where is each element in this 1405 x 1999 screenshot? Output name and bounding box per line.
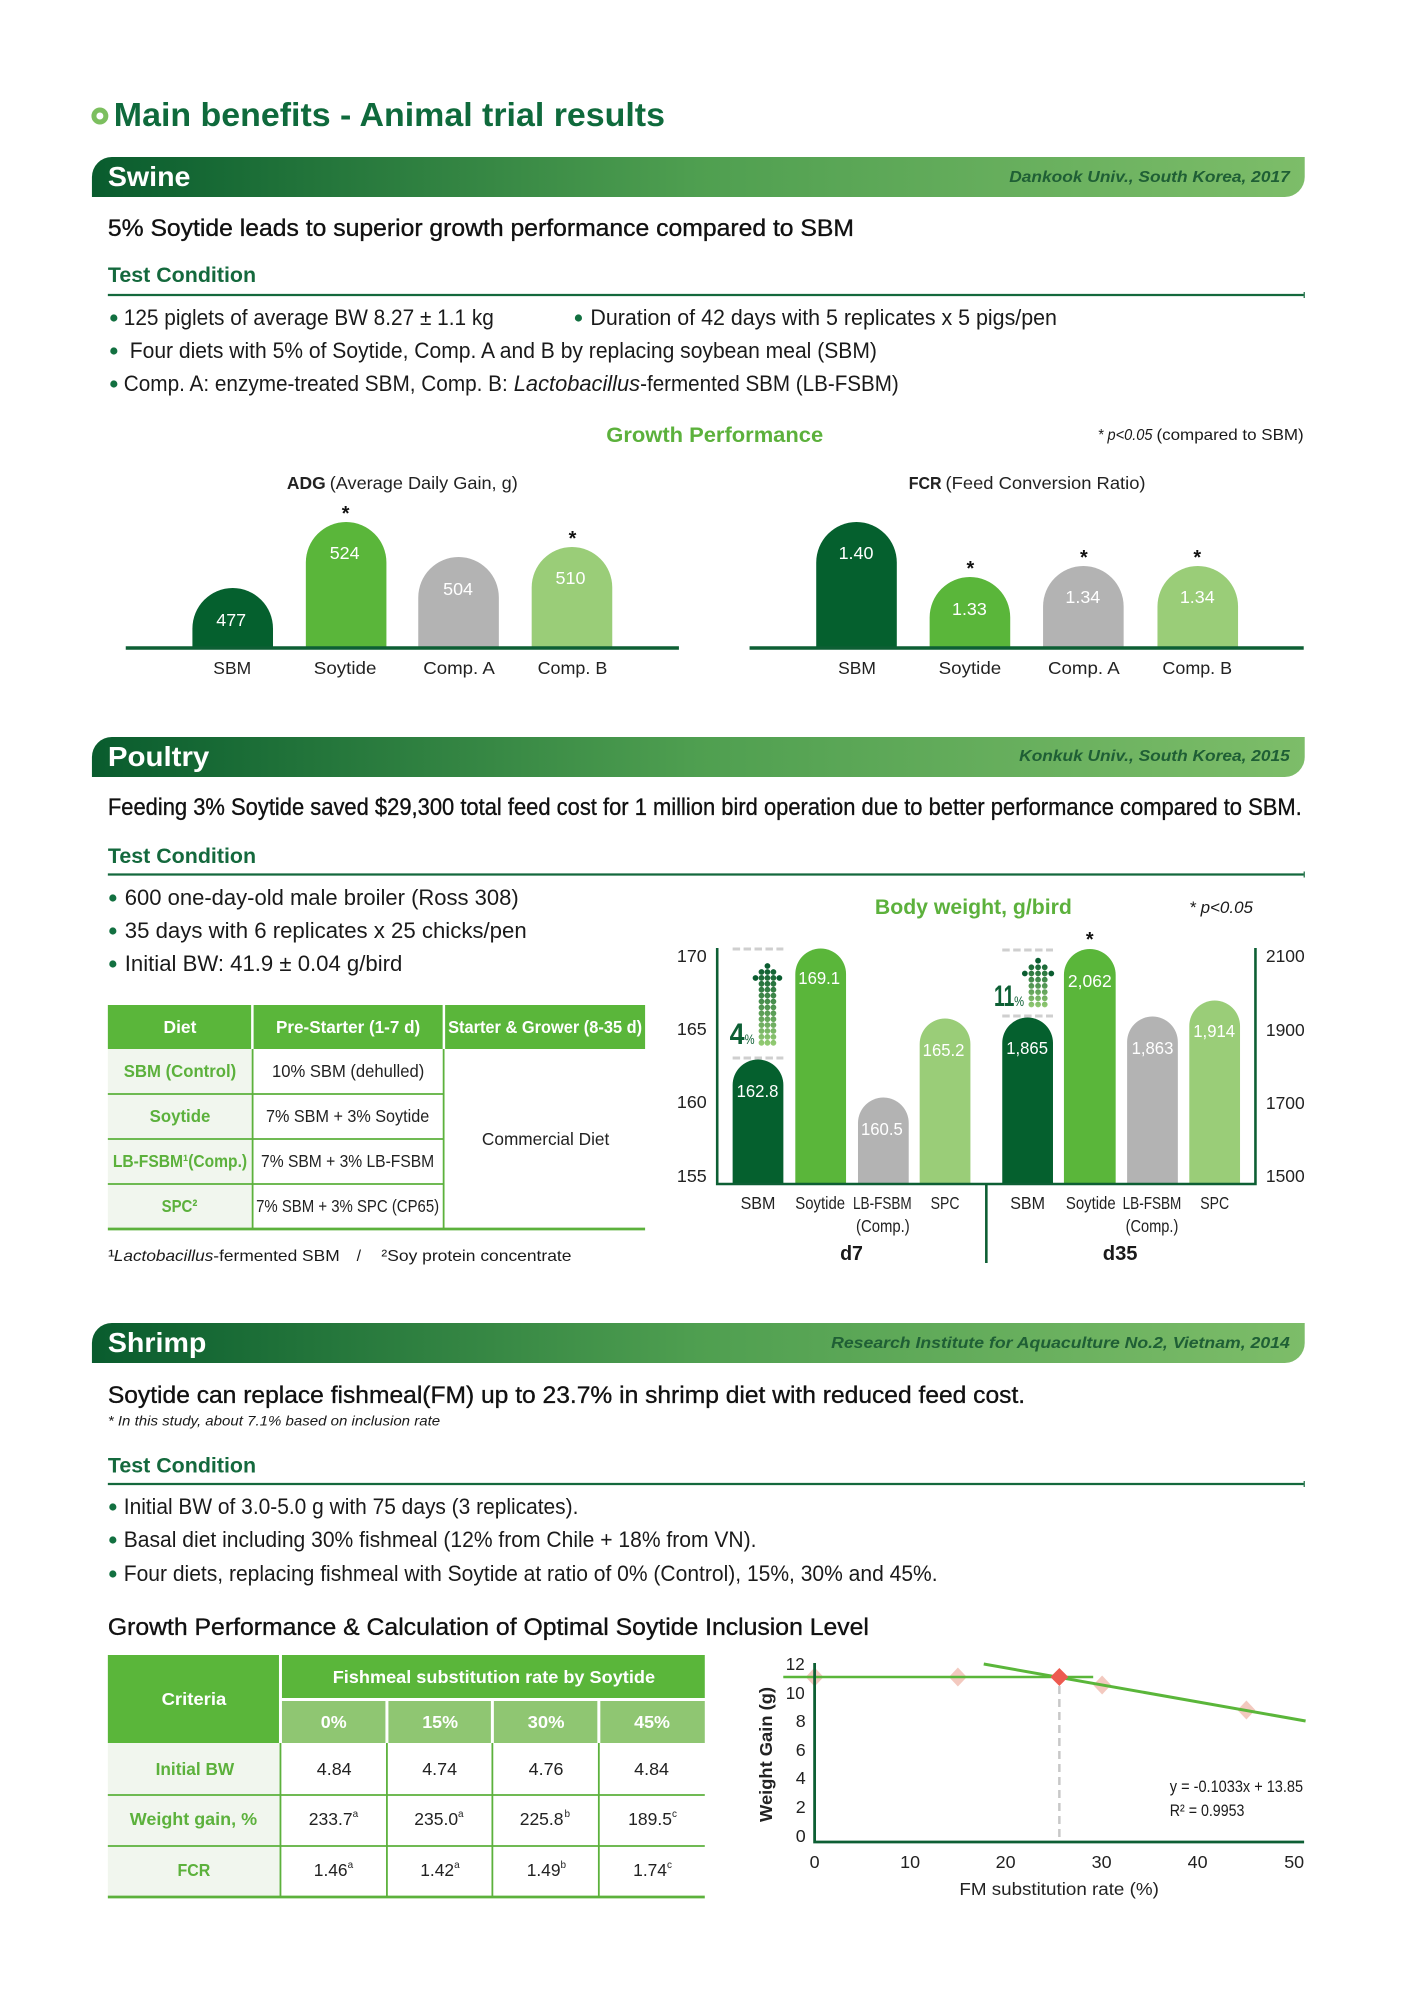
panel: poultry — [92, 737, 1305, 1265]
diet table: 7% SBM + 3% Soytide — [266, 1106, 429, 1126]
diet table: SPC² — [162, 1196, 197, 1216]
diet table: 7% SBM + 3% LB-FSBM — [261, 1151, 434, 1171]
regression equation — [1170, 1777, 1303, 1820]
results table: 1.42 — [420, 1860, 454, 1880]
key message: shrimp: Soytide can replace fishmeal(FM) up to 23.7% in shrimp diet with reduced feed cost. — [108, 1382, 1025, 1409]
results table: b — [565, 1809, 570, 1820]
panel: shrimp — [92, 1323, 1306, 1899]
category labels: Soytide — [795, 1193, 845, 1213]
y axis labels: 12 — [786, 1654, 805, 1674]
category labels: SPC — [931, 1193, 959, 1213]
category labels: d7 — [840, 1243, 863, 1265]
results table: 4.84 — [317, 1759, 352, 1779]
x axis labels: 10 — [900, 1852, 920, 1872]
test condition bullets: swine: Lactobacillus — [514, 371, 640, 396]
right axis labels: 1500 — [1266, 1166, 1305, 1186]
right axis labels: 1900 — [1266, 1020, 1305, 1040]
diet table: Starter & Grower (8-35 d) — [448, 1017, 642, 1037]
bars d7: 160.5 — [861, 1119, 903, 1139]
bar chart: FCR: Soytide — [939, 658, 1001, 678]
bars d7 — [733, 948, 970, 1184]
bar chart: ADG: 510 — [556, 568, 585, 588]
results table: a — [458, 1809, 464, 1820]
results table: c — [672, 1809, 677, 1820]
diet table: Pre-Starter (1-7 d) — [276, 1017, 420, 1037]
section header: swine — [92, 157, 1305, 197]
bar chart: ADG: 504 — [443, 579, 473, 599]
panel: swine — [92, 157, 1305, 678]
x axis labels: 20 — [996, 1852, 1016, 1872]
bars d35: 1,865 — [1006, 1038, 1048, 1058]
y axis labels: 0 — [796, 1826, 806, 1846]
bar chart: ADG — [126, 473, 679, 678]
results table: 15% — [422, 1712, 458, 1732]
bar chart: FCR: 1.34 — [1065, 587, 1100, 607]
results table: 233.7 — [309, 1809, 353, 1829]
table footnote: / — [357, 1248, 362, 1265]
x axis labels: 30 — [1092, 1852, 1112, 1872]
test condition bullets: swine — [110, 305, 1057, 396]
diet table: Commercial Diet — [482, 1129, 609, 1149]
category labels: LB-FSBM — [853, 1193, 912, 1213]
category labels — [741, 1193, 1229, 1265]
diet table — [108, 1005, 645, 1229]
results table — [108, 1655, 705, 1897]
left axis labels: 155 — [677, 1166, 707, 1186]
bar chart: FCR: 1.34 — [1180, 587, 1215, 607]
section header: swine: Swine — [108, 161, 190, 192]
left axis labels — [677, 946, 707, 1186]
y axis labels: 4 — [796, 1768, 806, 1788]
section header: poultry: Poultry — [108, 741, 210, 772]
results table: 1.74 — [633, 1860, 667, 1880]
section header: swine: Dankook Univ., South Korea, 2017 — [1009, 169, 1291, 186]
bar chart: FCR: 1.40 — [839, 543, 873, 563]
test condition heading: swine: Test Condition — [108, 264, 256, 287]
bar chart: ADG: SBM — [213, 658, 251, 678]
heading: growth performance and optimal inclusion: Growth Performance & Calculation of Optimal Soytide Inclusion Level — [108, 1614, 869, 1641]
category labels: Soytide — [1066, 1193, 1116, 1213]
results table: a — [348, 1860, 354, 1871]
bar chart: FCR: FCR — [909, 473, 942, 493]
table footnote: -fermented SBM — [213, 1248, 340, 1265]
left axis labels: 160 — [677, 1092, 707, 1112]
increase arrow: 11%: 11 — [994, 980, 1014, 1013]
results table: c — [667, 1860, 672, 1871]
bars d35: 1,863 — [1132, 1038, 1173, 1058]
x axis title: FM substitution rate (%) — [959, 1879, 1159, 1899]
key message: poultry: Feeding 3% Soytide saved $29,300 total feed cost for 1 million bird operation due to better performance compared to SBM. — [108, 794, 1302, 821]
test condition bullets: shrimp — [109, 1494, 938, 1586]
results table: 1.46 — [314, 1860, 348, 1880]
results table: 4.76 — [529, 1759, 564, 1779]
diet table: SBM (Control) — [124, 1061, 236, 1081]
bar chart: FCR: Comp. A — [1048, 658, 1120, 678]
section header: shrimp: Shrimp — [108, 1327, 206, 1358]
bars d7: 169.1 — [798, 968, 840, 988]
bar chart: body weight — [677, 929, 1305, 1265]
bar chart: ADG: 524 — [330, 543, 360, 563]
y axis labels: 10 — [786, 1683, 805, 1703]
study note: * In this study, about 7.1% based on inclusion rate — [108, 1412, 440, 1429]
results table: Weight gain, % — [130, 1809, 257, 1829]
results table: 225.8 — [520, 1809, 564, 1829]
bar chart: FCR: SBM — [838, 658, 876, 678]
right axis labels: 2100 — [1266, 946, 1305, 966]
regression equation: y = -0.1033x + 13.85 — [1170, 1777, 1303, 1796]
diet table: Diet — [164, 1017, 196, 1037]
diet table: 10% SBM (dehulled) — [272, 1061, 424, 1081]
test condition bullets: swine: Four diets with 5% of Soytide, Comp. A and B by replacing soybean meal (SBM) — [130, 338, 877, 363]
bar chart: ADG: Comp. A — [423, 658, 495, 678]
key message: swine: 5% Soytide leads to superior growth performance compared to SBM — [108, 215, 854, 242]
results table: a — [353, 1809, 359, 1820]
bar chart: FCR: * — [967, 558, 975, 580]
results table: Fishmeal substitution rate by Soytide — [333, 1667, 655, 1687]
bar chart: FCR: * — [1193, 547, 1201, 569]
right axis labels: 1700 — [1266, 1093, 1305, 1113]
title: Main benefits - Animal trial results — [114, 96, 665, 133]
bar chart: FCR — [750, 473, 1304, 678]
bars d35 — [1002, 929, 1240, 1184]
category labels: (Comp.) — [856, 1216, 910, 1236]
increase arrow: 4%: 4 — [730, 1018, 745, 1051]
category labels: d35 — [1103, 1243, 1138, 1265]
line chart: weight gain vs FM substitution — [756, 1654, 1306, 1899]
results table: 189.5 — [628, 1809, 672, 1829]
bar chart: ADG: * — [569, 528, 577, 550]
results table: b — [561, 1860, 567, 1871]
category labels: (Comp.) — [1126, 1216, 1178, 1236]
section header: shrimp: Research Institute for Aquaculture No.2, Vietnam, 2014 — [831, 1335, 1290, 1352]
increase arrow: 4%: % — [745, 1031, 755, 1047]
significance note — [1098, 427, 1304, 444]
bar chart: ADG: ADG — [287, 473, 326, 493]
x axis labels — [810, 1852, 1304, 1872]
significance note: body weight: * p<0.05 — [1189, 898, 1254, 917]
category labels: SBM — [741, 1193, 775, 1213]
y axis title: Weight Gain (g) — [756, 1687, 776, 1822]
bar chart: ADG: (Average Daily Gain, g) — [330, 473, 518, 493]
left axis labels: 165 — [677, 1019, 707, 1039]
bar chart: FCR: Comp. B — [1162, 658, 1232, 678]
test condition bullets: poultry: 600 one-day-old male broiler (Ross 308) — [125, 885, 519, 910]
optimal point marker — [1050, 1668, 1068, 1686]
diet table: Soytide — [150, 1106, 210, 1126]
significance note: (compared to SBM) — [1156, 427, 1304, 444]
y axis labels: 6 — [796, 1740, 806, 1760]
y axis labels: 8 — [796, 1711, 806, 1731]
results table: 4.74 — [422, 1759, 457, 1779]
bar chart: ADG: 477 — [216, 610, 246, 630]
table footnote: ¹ — [108, 1248, 115, 1265]
results table: a — [454, 1860, 460, 1871]
test condition bullets: shrimp: Basal diet including 30% fishmeal (12% from Chile + 18% from VN). — [124, 1527, 757, 1552]
category labels: LB-FSBM — [1123, 1193, 1181, 1213]
test condition heading: shrimp: Test Condition — [108, 1454, 256, 1478]
y axis labels — [786, 1654, 806, 1846]
results table: FCR — [177, 1860, 210, 1880]
data points — [806, 1668, 1255, 1720]
x axis labels: 50 — [1284, 1852, 1304, 1872]
bars d35: 1,914 — [1193, 1021, 1235, 1041]
bar chart: FCR: 1.33 — [952, 599, 987, 619]
bars d7: 162.8 — [737, 1081, 778, 1101]
results table: 4.84 — [634, 1759, 669, 1779]
chart heading: body weight: Body weight, g/bird — [875, 895, 1072, 919]
section header: poultry — [92, 737, 1305, 777]
category labels: SBM — [1010, 1193, 1045, 1213]
test condition bullets: swine: 125 piglets of average BW 8.27 ± 1.1 kg — [124, 305, 494, 330]
test condition bullets: poultry: Initial BW: 41.9 ± 0.04 g/bird — [125, 951, 402, 976]
increase arrow: 4% — [730, 949, 783, 1058]
significance note: * p<0.05 — [1098, 427, 1153, 444]
test condition bullets: swine: Comp. A: enzyme-treated SBM, Comp. B: — [124, 371, 508, 396]
results table: 0% — [321, 1712, 347, 1732]
bar chart: ADG: Soytide — [314, 658, 376, 678]
y axis labels: 2 — [796, 1797, 806, 1817]
table footnote: ²Soy protein concentrate — [381, 1248, 572, 1265]
table footnote — [108, 1248, 572, 1265]
table footnote: Lactobacillus — [114, 1248, 213, 1265]
bar chart: FCR: * — [1080, 547, 1088, 569]
test condition heading: poultry: Test Condition — [108, 845, 256, 868]
test condition bullets: swine: Duration of 42 days with 5 replicates x 5 pigs/pen — [590, 305, 1057, 330]
test condition bullets: swine: -fermented SBM (LB-FSBM) — [640, 371, 899, 396]
increase arrow: 11% — [994, 950, 1054, 1016]
test condition bullets: shrimp: Four diets, replacing fishmeal with Soytide at ratio of 0% (Control), 15%, 30% and 45%. — [124, 1561, 938, 1586]
test condition bullets: poultry — [109, 885, 527, 976]
results table: 30% — [528, 1712, 565, 1732]
bars d7: 165.2 — [923, 1040, 964, 1060]
regression equation: R² = 0.9953 — [1170, 1801, 1244, 1820]
results table: Initial BW — [156, 1759, 234, 1779]
diet table: LB-FSBM¹(Comp.) — [113, 1151, 247, 1171]
bar chart: ADG: * — [342, 503, 350, 525]
increase arrow: 11%: % — [1014, 993, 1024, 1009]
left axis labels: 170 — [677, 946, 707, 966]
results table: Criteria — [162, 1689, 227, 1709]
test condition bullets: poultry: 35 days with 6 replicates x 25 chicks/pen — [125, 918, 527, 943]
bars d35: * — [1086, 929, 1094, 951]
results table: 1.49 — [527, 1860, 561, 1880]
results table: 235.0 — [414, 1809, 458, 1829]
bar chart: FCR: (Feed Conversion Ratio) — [946, 473, 1146, 493]
bar chart: ADG: Comp. B — [538, 658, 607, 678]
right axis labels — [1266, 946, 1305, 1186]
section header: poultry: Konkuk Univ., South Korea, 2015 — [1019, 748, 1291, 765]
test condition bullets: shrimp: Initial BW of 3.0-5.0 g with 75 days (3 replicates). — [124, 1494, 578, 1519]
chart heading: growth performance: Growth Performance — [606, 423, 823, 447]
diet table: 7% SBM + 3% SPC (CP65) — [256, 1196, 439, 1216]
results table: 45% — [634, 1712, 670, 1732]
bars d35: 2,062 — [1068, 971, 1112, 991]
x axis labels: 0 — [810, 1852, 820, 1872]
x axis labels: 40 — [1188, 1852, 1208, 1872]
section header: shrimp — [92, 1323, 1305, 1363]
category labels: SPC — [1200, 1193, 1229, 1213]
